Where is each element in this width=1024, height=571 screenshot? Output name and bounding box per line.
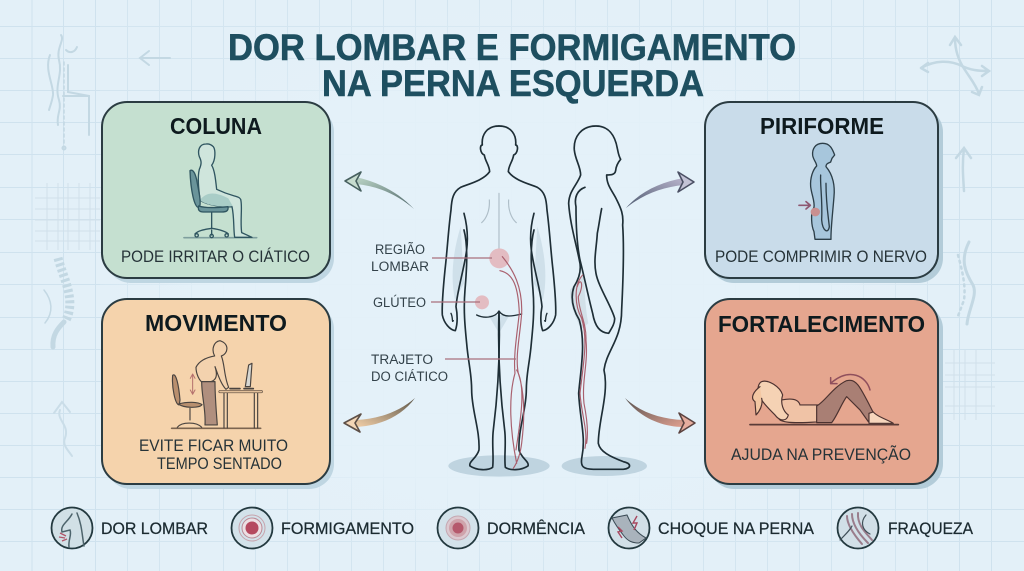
legend: formigamento: FORMIGAMENTO [281,519,414,538]
label: glúteo: GLÚTEO [373,295,426,310]
title [228,27,796,104]
caption: movimento: EVITE FICAR MUITO [139,437,288,455]
arm [575,187,615,333]
caption: fortalecimento: AJUDA NA PREVENÇÃO [731,444,911,464]
heading: movimento: MOVIMENTO [145,310,287,336]
background decoration: fine grid left [35,183,100,250]
label: glúteo [373,295,480,310]
label: região lombar: LOMBAR [371,259,429,274]
icon: woman doing crunch exercise [750,375,898,425]
heading: coluna: COLUNA [170,113,262,139]
background decoration: spine left [44,258,70,347]
body figure: side view [562,126,647,476]
arrow: to fortalecimento [625,398,695,433]
caption: coluna: PODE IRRITAR O CIÁTICO [121,247,310,266]
icon: side profile with compressed nerve [799,143,835,239]
ground shadow: side view [562,456,647,476]
body figure: back view [442,126,556,477]
caption: movimento [139,437,288,473]
back and leg shading [570,273,588,330]
background decoration: small arrow left [140,51,170,65]
legend: dormência: DORMÊNCIA [487,519,586,538]
sciatic nerve: side [576,275,587,448]
legend: dor lombar: DOR LOMBAR [101,519,208,538]
panel: coluna [102,102,334,283]
body outline [569,126,630,469]
arrow: to movimento [344,398,415,432]
icon: numbness rings [438,508,478,548]
legend: fraqueza [838,508,974,548]
left half outline [442,126,499,470]
sciatic nerve path [500,257,524,468]
label: trajeto do ciático [371,352,516,384]
hand details [451,313,547,321]
legend: dor lombar [52,508,208,548]
legend: choque na perna [608,508,815,548]
heading: piriforme: PIRIFORME [760,113,884,139]
right half outline [499,126,556,470]
background decoration: curved spine right [958,242,974,324]
icon: person standing up from chair at desk [172,341,261,428]
icon: seated person on office chair [184,144,257,238]
arrow: to piriforme [626,172,694,208]
caption: movimento: TEMPO SENTADO [157,455,282,473]
background decoration: crossing arrows right [921,37,989,95]
label: região lombar: REGIÃO [375,242,425,257]
heading: fortalecimento: FORTALECIMENTO [718,311,925,337]
panel: piriforme [705,102,943,283]
legend: choque na perna: CHOQUE NA PERNA [658,519,815,538]
icon: tingling rings [232,508,272,548]
icon: weak leg [838,508,878,548]
background decoration: wavy arrow lower left [54,402,72,456]
icon: lower back [52,508,92,548]
label: trajeto do ciático: DO CIÁTICO [371,369,448,384]
label: região lombar [371,242,492,274]
legend: fraqueza: FRAQUEZA [888,519,974,538]
muscle shading [453,227,545,333]
panel: movimento [102,299,334,489]
panel: fortalecimento [705,299,943,489]
background decoration: fine grid right [945,350,995,420]
spine and shoulder blade marks [482,193,516,257]
caption: piriforme: PODE COMPRIMIR O NERVO [715,248,927,266]
buttock crease [477,311,522,317]
icon: leg with lightning [608,508,650,548]
title: DOR LOMBAR E FORMIGAMENTO [228,27,796,68]
title: NA PERNA ESQUERDA [322,63,704,104]
label: trajeto do ciático: TRAJETO [371,352,433,367]
background decoration: posture sketch [48,35,89,150]
background decoration: up arrow right [956,148,971,191]
arrow: to coluna [345,172,414,209]
pain spots [489,248,509,268]
ground shadow: back view [448,455,550,477]
legend: dormência [438,508,586,548]
legend: formigamento [232,508,414,548]
